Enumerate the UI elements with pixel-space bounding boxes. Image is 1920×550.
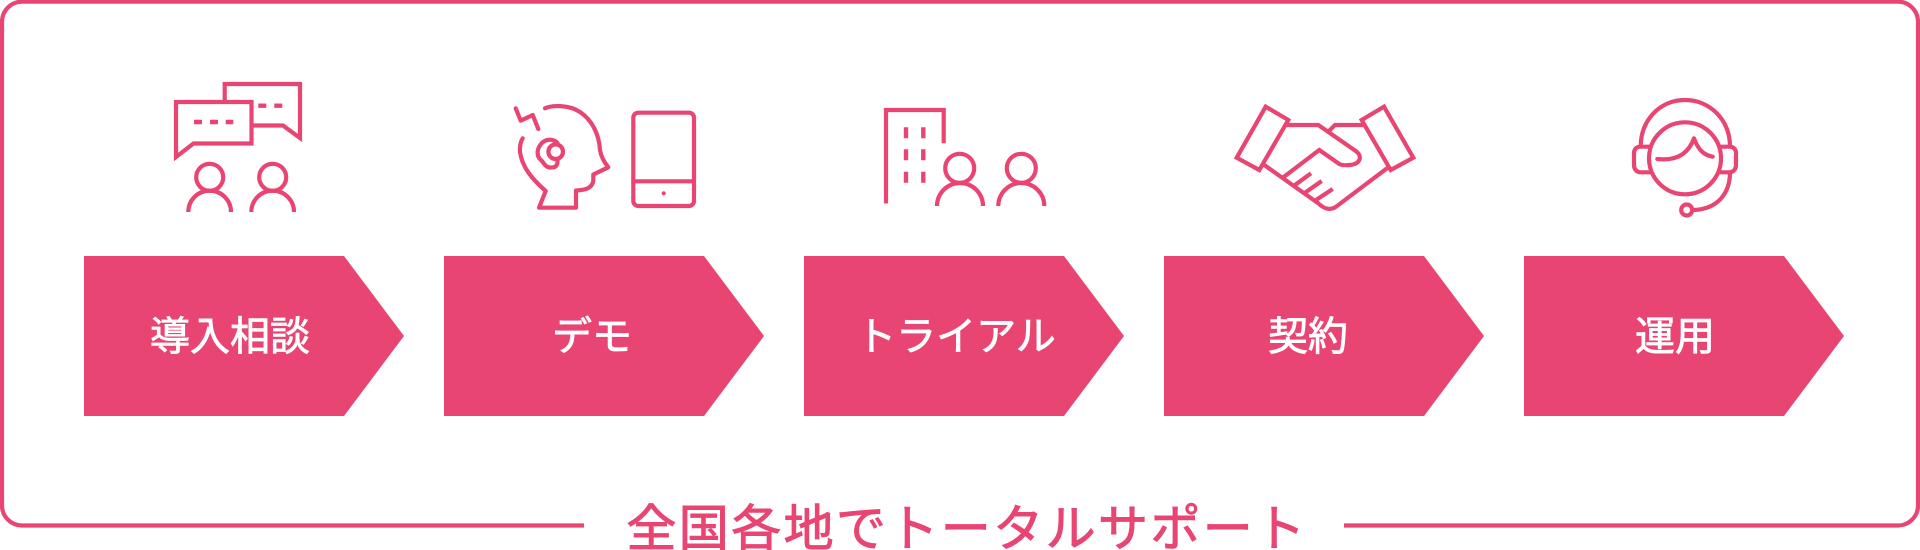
step arrow: 導入相談: 導入相談	[150, 315, 310, 359]
step arrow: デモ	[444, 256, 764, 416]
step arrow: 契約: 契約	[1268, 315, 1348, 359]
icon: handshake	[1237, 107, 1413, 209]
icon: consultation	[176, 84, 300, 212]
step arrow: デモ: デモ	[552, 315, 632, 359]
icon: head and tablet	[516, 106, 694, 208]
icon: operator headset	[1634, 100, 1736, 216]
step arrow: 契約	[1164, 256, 1484, 416]
step arrow: トライアル: トライアル	[856, 315, 1056, 359]
step arrow: トライアル	[804, 256, 1124, 416]
step arrow: 導入相談	[84, 256, 404, 416]
step arrow: 運用	[1524, 256, 1844, 416]
icon: company and people	[886, 110, 1044, 206]
step arrow: 運用: 運用	[1635, 315, 1715, 359]
